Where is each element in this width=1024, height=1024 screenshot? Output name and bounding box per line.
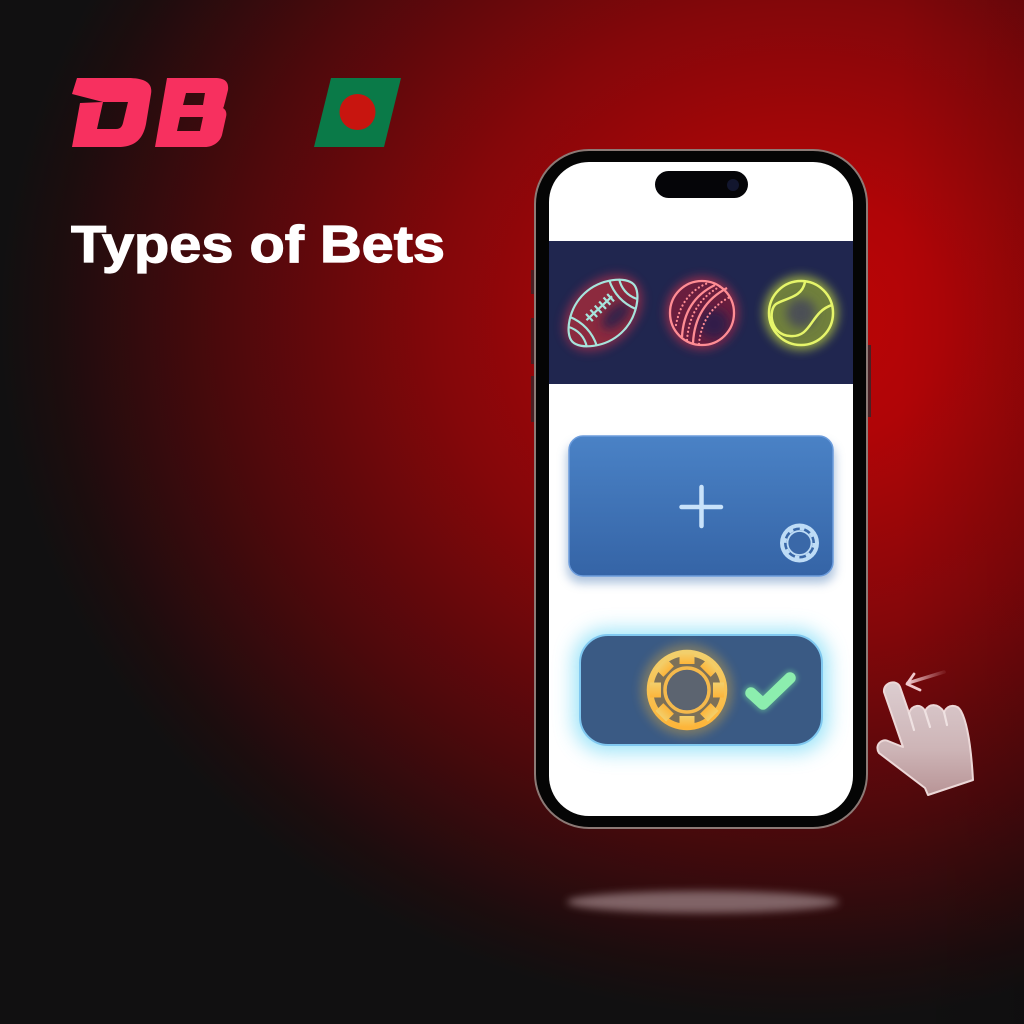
- phone side buttons: [531, 270, 871, 422]
- phone body: [535, 150, 867, 828]
- icon: plus: [682, 487, 721, 526]
- icon: gold chip: [641, 644, 733, 736]
- title: Types of Bets: [71, 216, 445, 274]
- swipe arrow: [907, 672, 944, 690]
- icon: cricket ball: [666, 277, 738, 349]
- icon: tapping hand: [877, 672, 973, 795]
- phone: [531, 150, 871, 828]
- icon: check mark: [751, 678, 790, 704]
- phone screen: [549, 162, 853, 816]
- logo: DB: [72, 78, 228, 147]
- dynamic island: [655, 171, 748, 198]
- flag: Bangladesh: [314, 78, 401, 147]
- icon: football: [549, 260, 657, 366]
- hand shape: [877, 682, 973, 795]
- icon: tennis ball: [764, 276, 838, 350]
- chip notches: [650, 653, 724, 727]
- icon: small chip: [780, 524, 819, 562]
- phone shadow: [567, 891, 839, 913]
- sports banner: [549, 241, 853, 384]
- card: confirmed bet: [574, 630, 828, 752]
- card: add stake: [567, 436, 835, 583]
- finger lines: [909, 711, 947, 730]
